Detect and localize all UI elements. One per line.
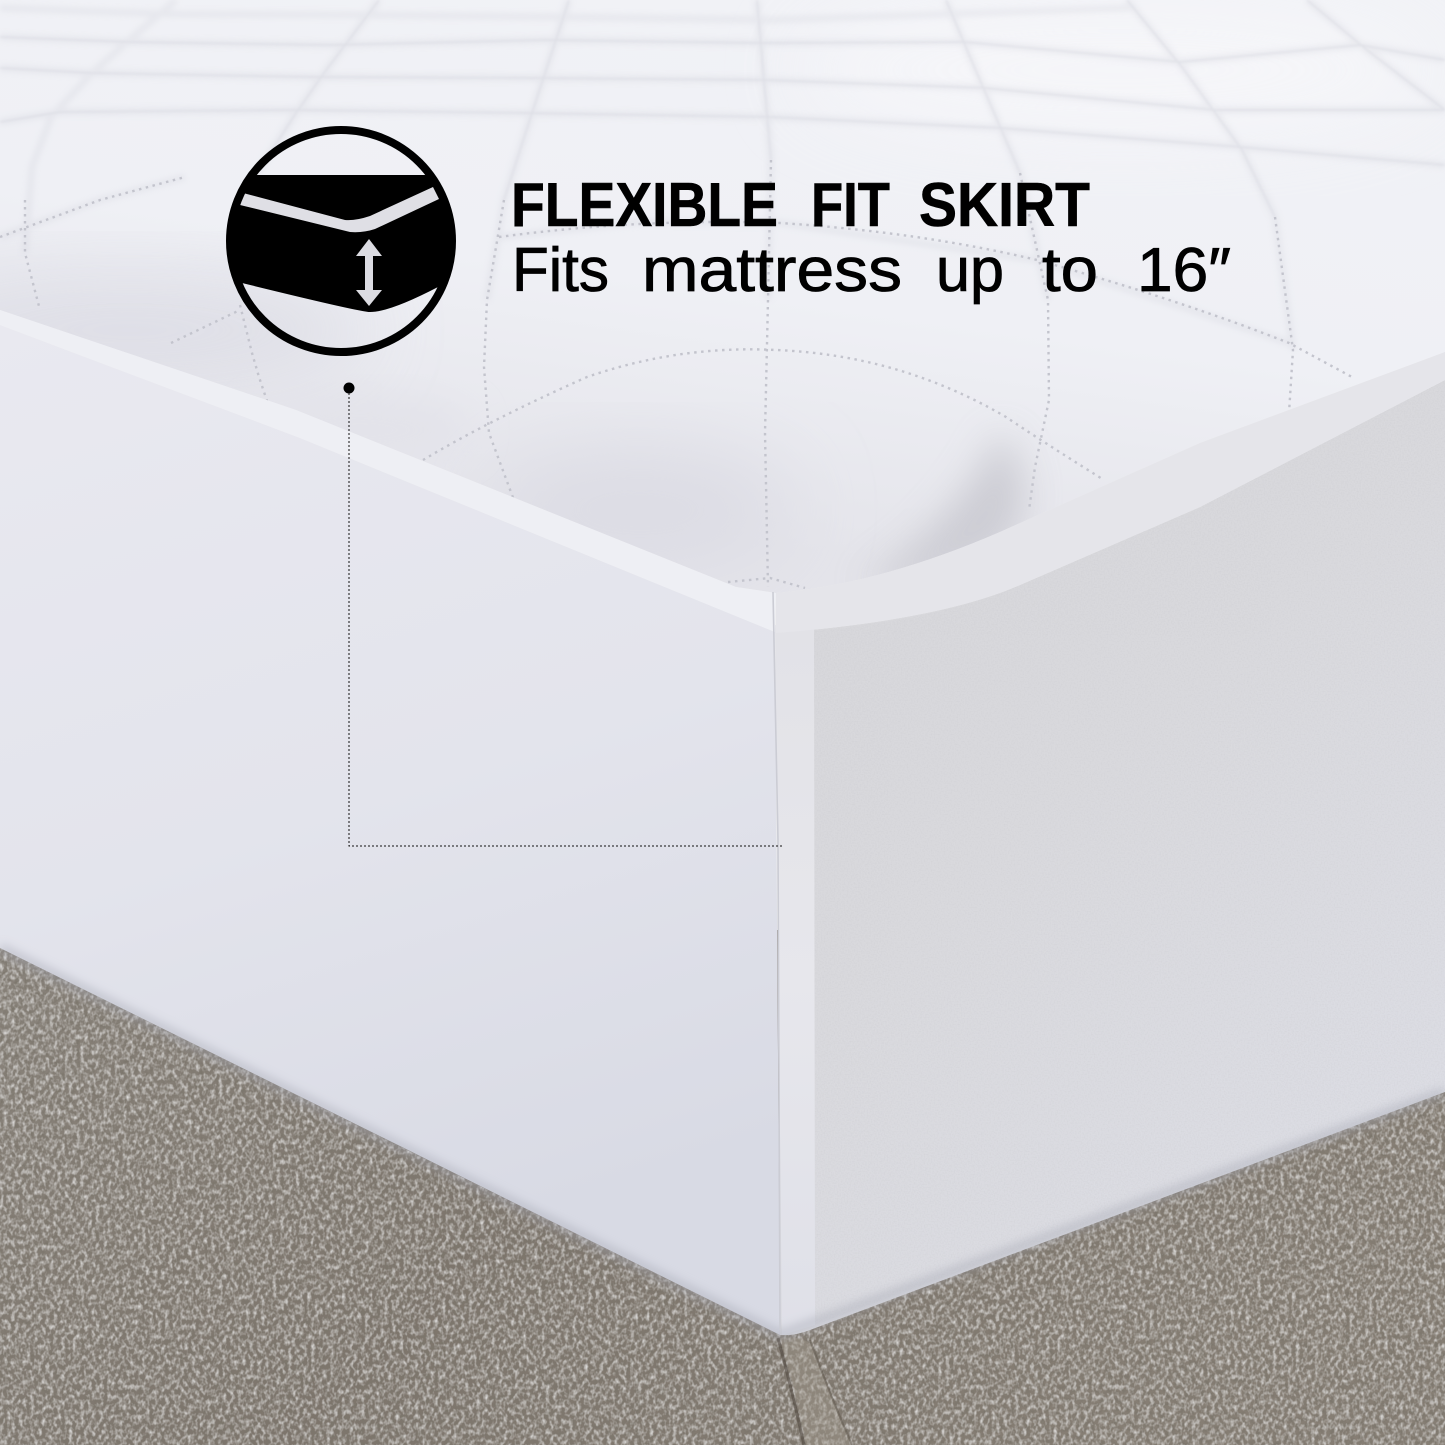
icon: mattress skirt stretch badge bbox=[226, 126, 456, 356]
subheading: Fits bbox=[512, 236, 609, 305]
heading: FIT bbox=[811, 171, 890, 240]
quilting pillow shadows bbox=[0, 0, 1445, 350]
panel: quilted top bbox=[0, 0, 1445, 640]
subheading: up bbox=[936, 236, 1004, 305]
heading and subheading bbox=[511, 171, 1231, 305]
corner seam bbox=[773, 592, 780, 1330]
corner strip of skirt bbox=[775, 625, 815, 1335]
soft shading on quilting bbox=[0, 284, 1034, 573]
heading: SKIRT bbox=[919, 171, 1090, 240]
heading: FLEXIBLE bbox=[511, 171, 778, 240]
callout: dotted leader line bbox=[344, 382, 783, 846]
panel: right skirt of protector bbox=[776, 380, 1445, 1335]
icon: double-headed arrow bbox=[356, 239, 382, 306]
panel: right piping band bbox=[776, 352, 1445, 633]
icon: white stripe bbox=[240, 187, 439, 232]
shadow along skirt bottom bbox=[0, 948, 1445, 1335]
quilting stitch lines: grid and diagonals bbox=[963, 42, 1365, 110]
subheading: to bbox=[1042, 236, 1098, 305]
subheading: 16″ bbox=[1137, 236, 1231, 305]
panel: left skirt of protector bbox=[0, 325, 780, 1335]
panel: left piping band bbox=[0, 310, 776, 632]
quilting stitch lines: dotted seams bbox=[0, 160, 1352, 588]
subheading: mattress bbox=[642, 236, 902, 305]
corner fold of fabric bbox=[780, 1337, 852, 1445]
icon: black mattress band bbox=[234, 175, 448, 312]
panel: fabric box base bbox=[0, 930, 1445, 1445]
